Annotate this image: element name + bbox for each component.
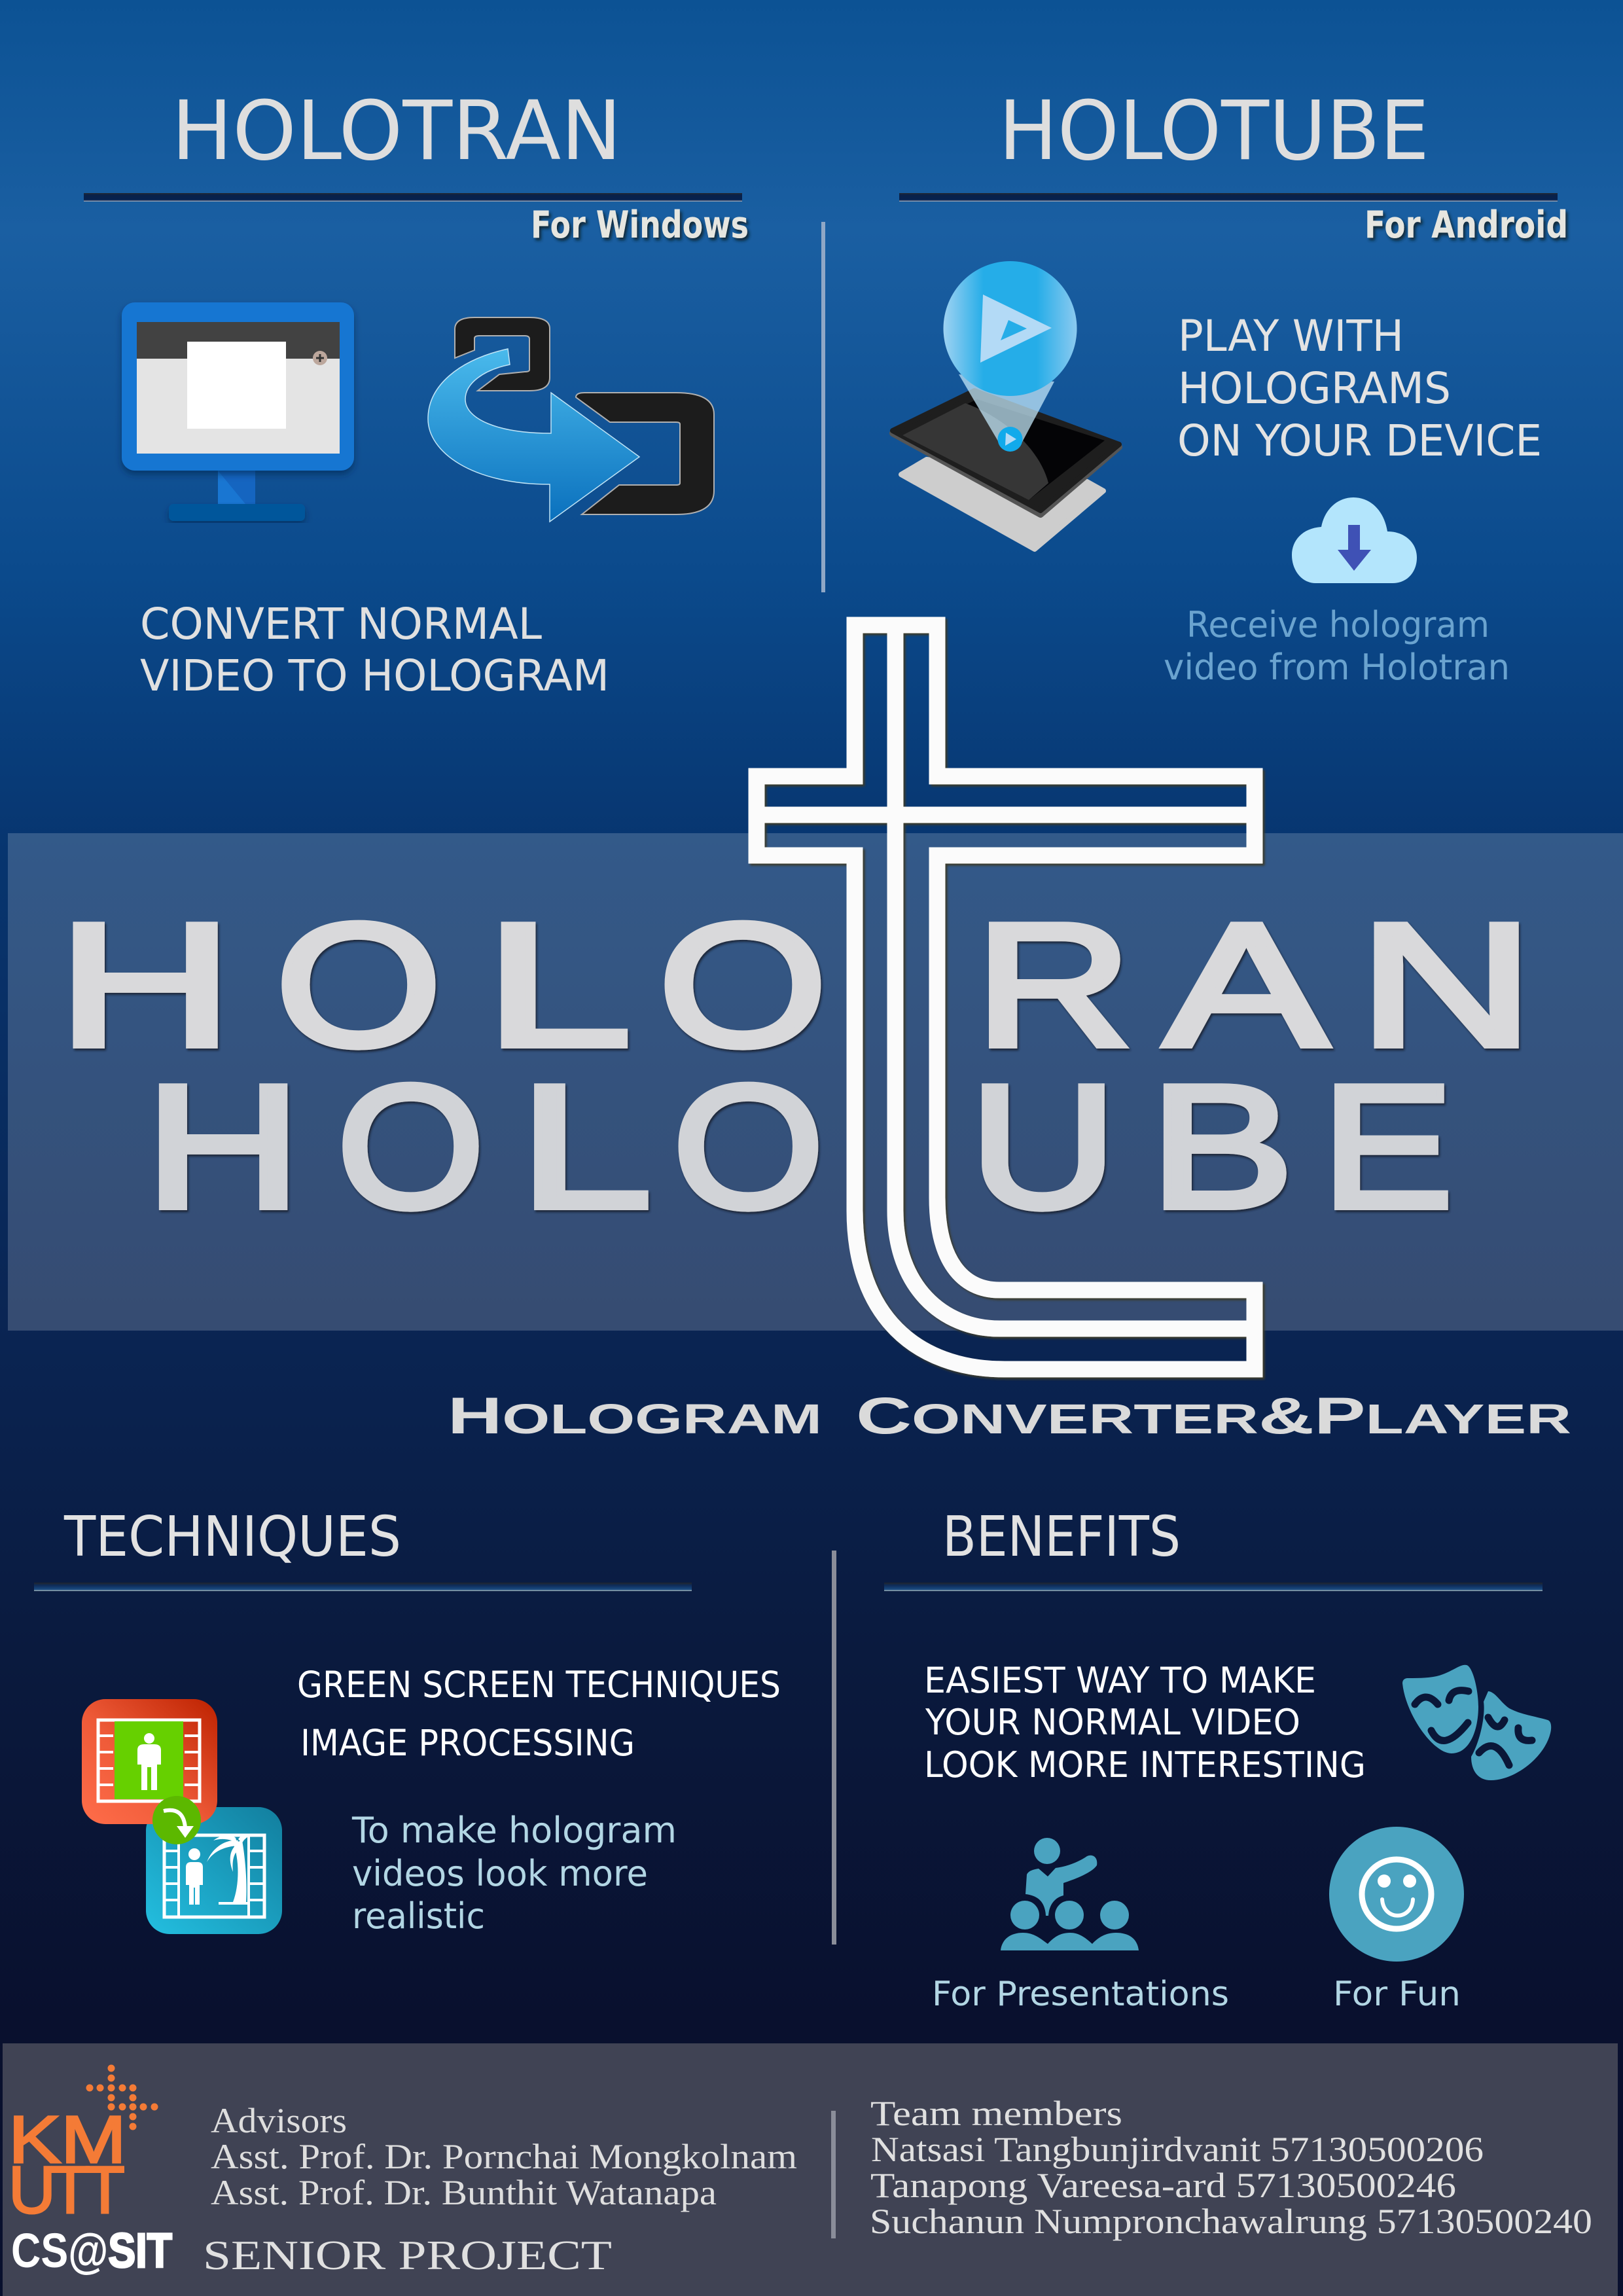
text: play with holograms on your device: ON YOUR DEVICE bbox=[1177, 416, 1542, 466]
title: HOLOTRAN large: N bbox=[1359, 887, 1534, 1083]
text: play with holograms on your device: HOLOGRAMS bbox=[1178, 363, 1451, 414]
text: easiest way to make your normal video look more interesting: EASIEST WAY TO MAKE bbox=[924, 1660, 1316, 1701]
icon: green screen video processing bbox=[82, 1699, 282, 1934]
title: HOLOTUBE large: B bbox=[1150, 1049, 1294, 1244]
subheading: For Android: For Android bbox=[1364, 204, 1568, 247]
text: advisors: Asst. Prof. Dr. Pornchai Mongkolnam bbox=[211, 2137, 797, 2176]
icon: convert arrow bbox=[428, 317, 714, 522]
heading: HOLOTUBE: HOLOTUBE bbox=[999, 84, 1429, 179]
title: HOLOTRAN large: A bbox=[1165, 887, 1329, 1083]
tagline: hologram converter and player: H OLOGRAM bbox=[448, 1386, 822, 1444]
divider: top sections bbox=[821, 222, 825, 592]
title: HOLOTRAN large: R bbox=[975, 887, 1132, 1083]
icon: smiley bbox=[1329, 1827, 1464, 1962]
text: team members: Suchanun Numpronchawalrung 57130500240 bbox=[870, 2202, 1592, 2241]
logo: KMUTT bbox=[9, 2064, 158, 2227]
logo: outlined letter t bbox=[757, 625, 1255, 1369]
logo: KMUTT: UTT bbox=[9, 2153, 124, 2227]
text: team members: Team members bbox=[870, 2094, 1122, 2133]
label: for fun: For Fun bbox=[1333, 1975, 1461, 2014]
title: HOLOTUBE large bbox=[145, 1049, 1453, 1244]
text: receive hologram video from holotran bbox=[1164, 604, 1510, 688]
text: team members: Natsasi Tangbunjirdvanit 57130500206 bbox=[871, 2130, 1484, 2169]
heading: HOLOTRAN: HOLOTRAN bbox=[171, 84, 622, 179]
text: receive hologram video from holotran: Receive hologram bbox=[1186, 604, 1489, 645]
icon: theatre masks bbox=[1402, 1665, 1551, 1780]
title: HOLOTUBE large: L bbox=[519, 1049, 652, 1244]
text: advisors bbox=[211, 2101, 797, 2212]
icon: presenter and audience bbox=[1001, 1838, 1139, 1950]
icon: cloud download bbox=[1292, 497, 1417, 583]
text: image processing: IMAGE PROCESSING bbox=[300, 1722, 635, 1764]
text: to make hologram videos look more realistic: videos look more bbox=[352, 1853, 648, 1894]
text: senior project: SENIOR PROJECT bbox=[203, 2232, 612, 2278]
text: play with holograms on your device bbox=[1177, 311, 1542, 466]
logo band panel bbox=[8, 833, 1623, 1331]
title: HOLOTUBE large: O bbox=[673, 1049, 824, 1244]
title: HOLOTRAN large bbox=[58, 887, 1534, 1083]
text: advisors: Advisors bbox=[211, 2101, 347, 2140]
heading rule: HOLOTRAN bbox=[84, 193, 742, 202]
text: convert normal video to hologram: CONVERT NORMAL bbox=[140, 599, 542, 649]
heading rule: benefits bbox=[884, 1583, 1543, 1591]
text: easiest way to make your normal video look more interesting: YOUR NORMAL VIDEO bbox=[925, 1702, 1300, 1743]
logo: CS@SIT: CS@SIT bbox=[11, 2223, 172, 2278]
title: HOLOTRAN large: L bbox=[484, 887, 632, 1083]
subheading: For Windows: For Windows bbox=[531, 204, 749, 247]
title: HOLOTUBE large: U bbox=[970, 1049, 1116, 1244]
text: easiest way to make your normal video look more interesting: LOOK MORE INTERESTING bbox=[924, 1744, 1366, 1785]
logo: KMUTT: KM bbox=[9, 2102, 126, 2177]
title: HOLOTUBE large: E bbox=[1322, 1049, 1453, 1244]
title: HOLOTUBE large: O bbox=[337, 1049, 484, 1244]
title: HOLOTRAN large: H bbox=[58, 887, 233, 1083]
label: for presentations: For Presentations bbox=[932, 1975, 1229, 2014]
text: green screen techniques: GREEN SCREEN TECHNIQUES bbox=[297, 1664, 781, 1706]
title: HOLOTRAN large: O bbox=[658, 887, 827, 1083]
heading: BENEFITS: BENEFITS bbox=[942, 1505, 1181, 1570]
tagline: hologram converter and player bbox=[448, 1386, 1571, 1444]
divider: lower sections bbox=[832, 1551, 836, 1945]
text: to make hologram videos look more realistic: realistic bbox=[352, 1895, 485, 1937]
text: advisors: Asst. Prof. Dr. Bunthit Watanapa bbox=[211, 2173, 717, 2212]
text: play with holograms on your device: PLAY WITH bbox=[1178, 311, 1404, 361]
text: team members bbox=[870, 2094, 1592, 2241]
text: receive hologram video from holotran: video from Holotran bbox=[1164, 647, 1510, 688]
text: to make hologram videos look more realistic: To make hologram bbox=[351, 1810, 677, 1851]
icon: monitor bbox=[122, 302, 354, 521]
heading: TECHNIQUES: TECHNIQUES bbox=[63, 1505, 401, 1570]
text: convert normal video to hologram: VIDEO TO HOLOGRAM bbox=[140, 651, 609, 701]
text: easiest way to make your normal video look more interesting bbox=[924, 1660, 1366, 1785]
tagline: hologram converter and player: C ONVERTER &P LAYER bbox=[856, 1386, 1571, 1444]
divider: footer bbox=[831, 2111, 836, 2238]
heading rule: techniques bbox=[34, 1583, 692, 1591]
panel: footer bbox=[3, 2043, 1618, 2296]
icon: tablet with hologram bbox=[893, 261, 1119, 549]
text: team members: Tanapong Vareesa-ard 57130500246 bbox=[870, 2166, 1456, 2205]
text: convert normal video to hologram bbox=[140, 599, 609, 701]
text: to make hologram videos look more realistic bbox=[351, 1810, 677, 1937]
heading rule: HOLOTUBE bbox=[899, 193, 1558, 202]
title: HOLOTUBE large: H bbox=[145, 1049, 301, 1244]
title: HOLOTRAN large: O bbox=[276, 887, 442, 1083]
